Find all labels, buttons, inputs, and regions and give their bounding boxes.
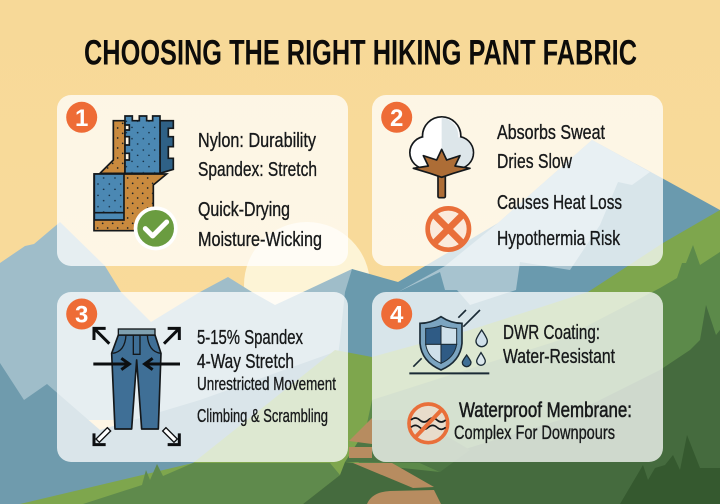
icon: cotton boll [411, 118, 473, 198]
text: waterproof membrane: Complex For Downpours [454, 422, 615, 444]
badge 4 [381, 298, 412, 330]
panel 2: cotton warning [372, 95, 663, 266]
text: nylon and spandex benefits: Spandex: Stretch [198, 158, 317, 181]
text: cotton risks: Causes Heat Loss [497, 191, 622, 214]
forest patch [345, 420, 470, 472]
text: DWR coating: DWR Coating: [503, 321, 600, 344]
text: cotton risks: Absorbs Sweat [497, 121, 605, 144]
light far mountains left [0, 222, 420, 420]
text: waterproof membrane [454, 399, 632, 444]
badge 1 [66, 102, 97, 133]
badge 2 [381, 102, 412, 133]
mid green slope lower left [83, 463, 340, 504]
icon: pants with stretch arrows [93, 328, 180, 445]
panel 4: water protection [372, 292, 663, 462]
badge 4: 4 [390, 302, 404, 329]
panel 3: stretch [57, 292, 348, 462]
text: stretch details: 4-Way Stretch [197, 350, 294, 373]
darker mid mountain left [0, 350, 360, 504]
central dark peak [330, 269, 500, 420]
panel 1: nylon and spandex [57, 95, 348, 266]
badge 3: 3 [75, 302, 88, 329]
text: stretch details: Climbing & Scrambling [197, 405, 328, 426]
text: nylon and spandex benefits: Moisture-Wicking [198, 228, 322, 251]
text: stretch details: Unrestricted Movement [197, 373, 336, 394]
bright green hillside [20, 210, 720, 504]
text: stretch details [197, 326, 336, 426]
badge 3 [66, 298, 97, 330]
text: nylon and spandex benefits: Nylon: Durability [198, 129, 317, 152]
icon: fabric swatches with check [94, 116, 178, 250]
large mountain snow cap [398, 140, 650, 305]
badge 2: 2 [390, 105, 403, 132]
text: waterproof membrane: Waterproof Membrane: [459, 399, 632, 422]
dark forest [303, 305, 720, 504]
text: DWR coating: Water-Resistant [503, 345, 615, 368]
text: DWR coating [503, 321, 615, 368]
badge 1: 1 [75, 105, 88, 132]
mid green slope right [350, 245, 720, 504]
sun [244, 222, 370, 348]
trail segments [349, 418, 372, 444]
text: cotton risks [497, 121, 622, 250]
icon: orange cross [428, 208, 469, 250]
darkest trees lower right [620, 435, 720, 504]
text: cotton risks: Hypothermia Risk [497, 227, 621, 250]
text: nylon and spandex benefits: Quick-Drying [198, 198, 290, 221]
icon: no waves [409, 404, 448, 443]
text: stretch details: 5-15% Spandex [197, 326, 304, 349]
text: nylon and spandex benefits [198, 129, 322, 251]
large right mountain [398, 140, 720, 420]
text: cotton risks: Dries Slow [497, 150, 572, 173]
icon: shield with water drops [409, 310, 489, 373]
